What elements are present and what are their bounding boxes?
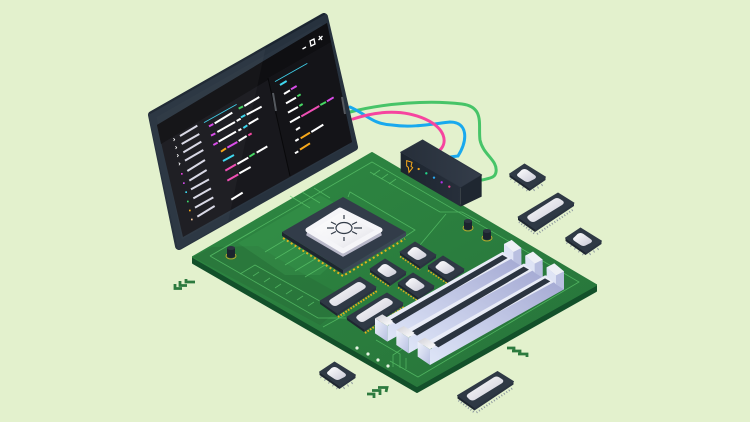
cpu base (282, 197, 406, 270)
long chips on board (320, 277, 404, 333)
circuit board (193, 153, 596, 392)
loose long chip top (518, 193, 574, 234)
arrows (175, 279, 527, 398)
solder dots (355, 346, 390, 368)
small chips on board (370, 242, 464, 301)
window controls (302, 36, 322, 49)
board edge (193, 257, 596, 392)
box top (401, 140, 482, 188)
pegs (226, 219, 492, 259)
cpu pins (283, 238, 405, 276)
monitor top edge (150, 14, 324, 113)
peg middle (463, 219, 473, 231)
chip A (400, 242, 436, 270)
blue cable (350, 107, 465, 157)
power box (401, 140, 482, 207)
arrows left (175, 279, 195, 288)
box side (461, 175, 482, 207)
arrows bottom (367, 388, 387, 398)
scrollbar right (342, 97, 345, 114)
cpu plate (308, 210, 380, 251)
sidebar icons (173, 138, 193, 220)
cpu (282, 197, 406, 276)
loose chips (320, 164, 602, 412)
long chip E (320, 277, 377, 317)
screen reflection (148, 46, 266, 250)
cpu plate side (307, 232, 381, 256)
code lines: right pane (275, 63, 334, 153)
icon: sun (327, 215, 362, 241)
cpu base side right (343, 232, 406, 274)
monitor frame (152, 17, 354, 246)
peg right (482, 229, 492, 241)
cpu base side left (282, 232, 343, 274)
code lines: middle pane (204, 97, 267, 200)
chip C (398, 273, 434, 301)
circuit traces (210, 162, 579, 377)
chip D (428, 256, 464, 284)
status lights (417, 168, 450, 188)
illustration: isometric motherboard with monitor (148, 13, 602, 414)
slot 3 (418, 263, 564, 365)
monitor (148, 14, 354, 250)
box front (401, 152, 461, 207)
loose chip right (566, 228, 602, 255)
memory slots (375, 240, 564, 365)
lighter hatched region (238, 195, 375, 275)
chip B (370, 259, 406, 287)
shadow on board (193, 246, 350, 325)
right pane (268, 42, 352, 176)
cables (350, 102, 496, 180)
pink cable (353, 112, 444, 150)
screen (157, 23, 352, 237)
scrollbar left (273, 93, 276, 111)
lightning icon (407, 161, 413, 172)
sidebar code lines (180, 126, 215, 217)
arrows right (507, 348, 527, 357)
long chip F (347, 293, 404, 333)
slot 2 (396, 252, 543, 353)
title bar (157, 23, 331, 144)
loose chip top (510, 164, 546, 191)
green cable (350, 102, 496, 180)
pane divider (268, 78, 290, 176)
loose chip bottom (320, 362, 356, 389)
loose long chip bottom (458, 372, 514, 412)
peg left (226, 246, 236, 259)
slot 1 (375, 240, 521, 342)
board surface (193, 153, 596, 386)
